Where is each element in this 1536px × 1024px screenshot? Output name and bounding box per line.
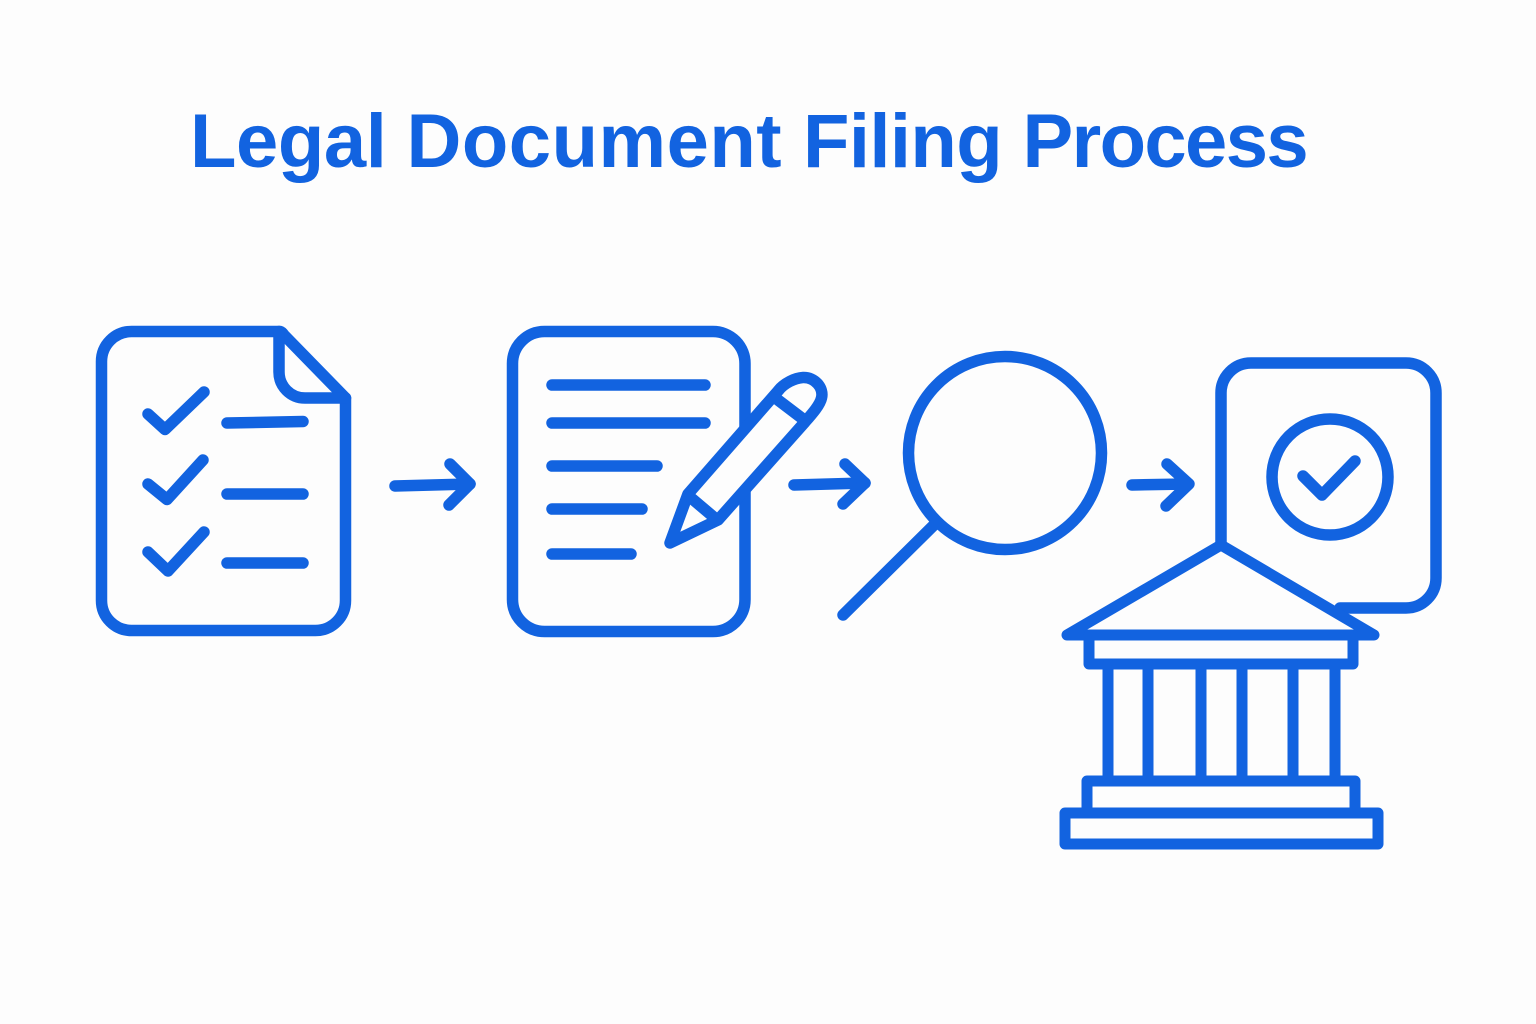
icon: approval card with check (1221, 363, 1436, 608)
title: Filing (803, 99, 1002, 184)
entablature (1089, 635, 1353, 664)
icon: checklist document (102, 332, 346, 630)
upper step (1087, 781, 1355, 813)
title: Process (1022, 99, 1307, 184)
pencil (670, 377, 822, 543)
title: Document (406, 99, 782, 184)
icon: document with pencil (512, 332, 822, 632)
arrow: drafting to review (794, 464, 865, 504)
page fold (279, 332, 346, 398)
title: Legal (190, 99, 386, 184)
text lines (552, 385, 705, 554)
arrow: checklist to drafting (395, 464, 470, 505)
checklist item 2 (148, 460, 303, 500)
document outline with folded corner (102, 332, 346, 630)
columns (1108, 664, 1335, 781)
icon: magnifying glass (843, 356, 1102, 615)
arrow: review to court filing (1132, 464, 1189, 506)
lower step (1065, 813, 1378, 844)
icon: courthouse (1065, 545, 1378, 844)
checklist item 1 (148, 392, 303, 430)
approval badge (1272, 419, 1388, 535)
checklist item 3 (148, 532, 303, 571)
roof (1067, 545, 1374, 635)
page outline (512, 332, 745, 632)
